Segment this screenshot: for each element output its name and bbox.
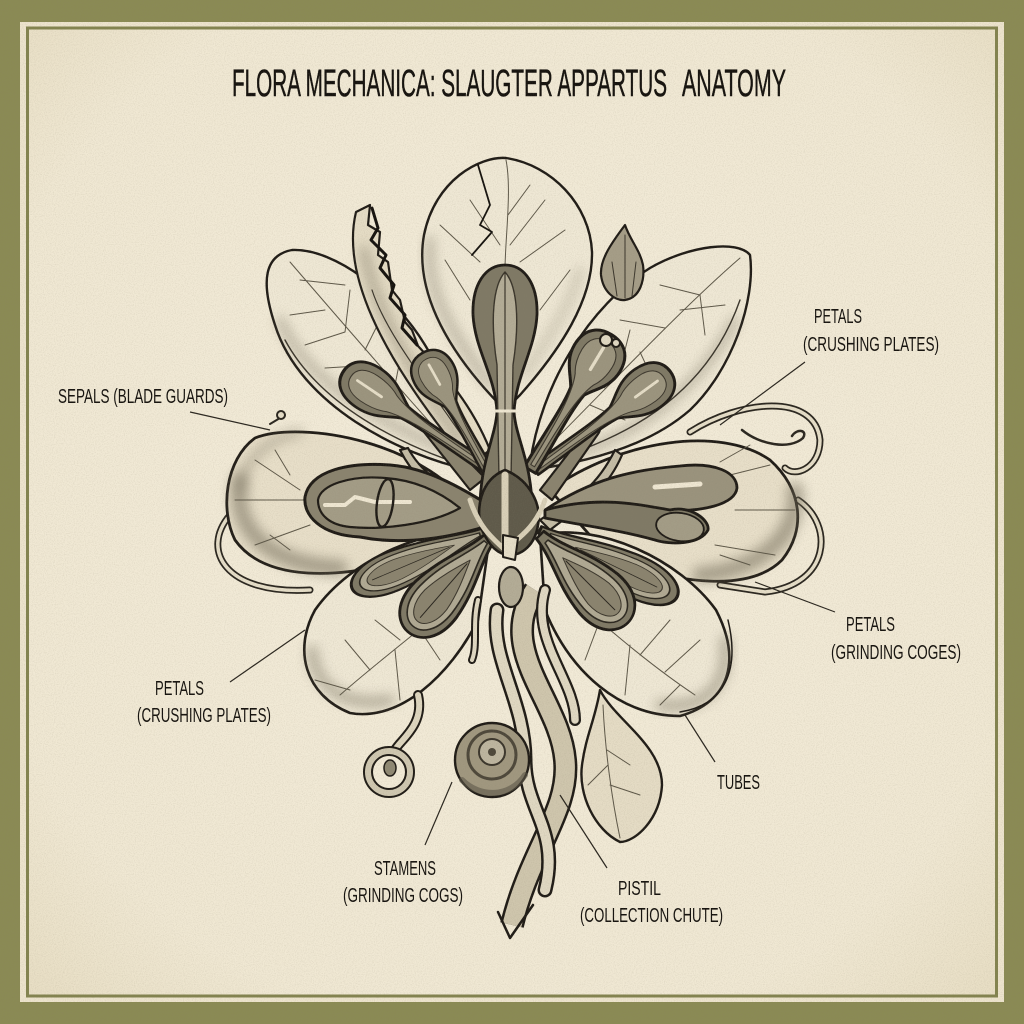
label: petals crushing plates, left: PETALS: [155, 678, 204, 700]
sepal: upper left: [267, 250, 470, 470]
label: petals crushing plates, right: (CRUSHING PLATES): [803, 334, 939, 356]
stub stalks around centre: [400, 424, 622, 530]
label: stamens: STAMENS: [374, 858, 436, 880]
petal: lower left: [304, 532, 490, 714]
petal: upper right: [530, 246, 751, 470]
side clubs: [305, 464, 737, 650]
flower illustration: [218, 158, 821, 938]
label: pistil: PISTIL: [618, 878, 661, 900]
lower leaf: [581, 690, 662, 842]
tendrils: [218, 406, 821, 592]
label: petals crushing plates, right: [803, 306, 939, 356]
title: FLORA MECHANICA: SLAUGTER APPARTUS: [232, 63, 667, 105]
label: stamens: [343, 858, 463, 907]
petal: middle right: [550, 441, 798, 581]
label: petals crushing plates, left: (CRUSHING PLATES): [137, 705, 271, 727]
label: pistil: [580, 878, 723, 927]
central pistil column: [473, 265, 537, 520]
label: pistil: (COLLECTION CHUTE): [580, 905, 723, 927]
leader lines: [190, 362, 835, 868]
seed: [601, 225, 643, 300]
label: petals crushing plates, left: [137, 678, 271, 727]
label: petals crushing plates, right: PETALS: [814, 306, 862, 328]
ring tendril: [368, 695, 419, 793]
blade leaf: [353, 205, 490, 465]
label: petals grinding coges: PETALS: [846, 614, 895, 636]
label: sepals: SEPALS (BLADE GUARDS): [58, 386, 228, 408]
petal: middle left: [227, 432, 480, 573]
petal: lower right: [540, 532, 732, 716]
central bulb: [470, 470, 545, 607]
label: petals grinding coges: [831, 614, 961, 664]
title: [232, 63, 786, 105]
stems: pistil chute: [472, 590, 575, 938]
label: stamens: (GRINDING COGS): [343, 885, 463, 907]
grinding cog ball: [455, 723, 529, 797]
label: tubes: TUBES: [717, 772, 760, 794]
petal: top centre: [422, 158, 592, 410]
label: petals grinding coges: (GRINDING COGES): [831, 642, 961, 664]
upper clubs: [331, 321, 684, 489]
title: ANATOMY: [682, 63, 786, 105]
